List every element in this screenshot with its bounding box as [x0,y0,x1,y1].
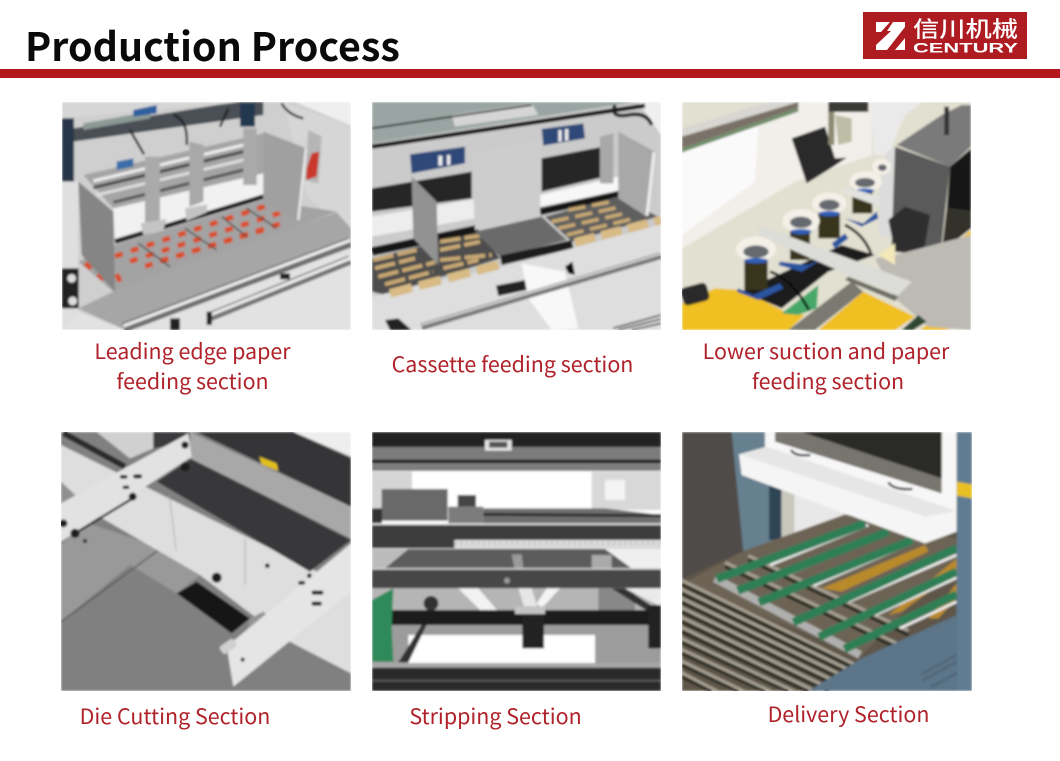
pull posts [141,103,257,235]
header rule [0,69,1060,78]
middle cross beam [372,569,661,588]
dark bracket [792,127,847,183]
tubes [770,225,872,310]
lower cross beam [372,610,661,625]
slot [177,582,250,633]
photo: cassette feeding section [372,102,661,330]
gold paper pieces [822,545,957,618]
logo: Century [863,12,1027,59]
green guard [372,588,393,662]
front body [372,224,661,330]
crossbar left [61,433,192,542]
icon: logo mark [876,22,905,50]
feed plates with orange suckers [78,200,337,292]
top beam [372,432,661,471]
photo: lower suction and paper feeding section [682,102,971,330]
caption: lower suction: feeding section [752,365,904,396]
title: Production Process [25,16,400,73]
right column [957,432,972,691]
white strips [770,525,957,628]
dark bed [157,458,351,572]
floor slab [61,522,200,622]
background machinery [372,472,412,508]
logo Chinese name: 信川机械 [913,12,1018,44]
back walls [682,432,743,579]
left feed plates [372,232,500,295]
red bracket [305,130,322,183]
front beam [78,212,351,328]
metal plate [875,235,971,330]
blue sensors [410,123,585,173]
left guide [78,182,115,292]
caption: cassette: Cassette feeding section [392,348,633,379]
bars [845,277,898,301]
center plate [472,141,541,230]
logo English name: CENTURY [913,40,1018,56]
handles [791,450,912,489]
photo: delivery section [682,432,972,691]
yellow frame [682,230,971,330]
clamp [522,607,544,648]
caption: lower suction [703,335,950,396]
bottom beam [372,663,661,691]
caption: delivery: Delivery Section [768,698,929,729]
crossbar right [227,543,351,687]
caption: die cutting: Die Cutting Section [80,700,270,731]
rollers [682,556,908,692]
right guide [263,132,307,222]
photo: leading edge paper feeding section [62,102,351,330]
rollers [390,220,661,293]
tray [739,447,957,543]
photo: stripping section [372,432,661,691]
metal head [888,105,971,258]
rod [682,102,798,152]
middle area [372,549,661,569]
suction cups [736,159,891,300]
right guide [618,132,655,217]
base cabinet [808,615,957,691]
left guide [412,177,438,265]
caption: lower suction: Lower suction and paper [703,335,949,366]
caption: leading edge [94,335,291,396]
caption: stripping: Stripping Section [409,700,582,731]
stripper box [382,489,448,521]
white window frame [765,432,957,512]
right feed plates [545,197,658,242]
photo: die cutting section [61,432,351,691]
upper cross beam [372,524,661,548]
rail [788,282,863,330]
caption: leading edge: Leading edge paper [94,335,291,366]
bolts and hardware [59,441,323,662]
warning label [259,457,278,471]
ruler [454,540,661,549]
suction table [475,217,567,257]
lower open area [372,625,661,664]
lower area [372,588,661,612]
rails [83,133,263,208]
caption: leading edge: feeding section [116,365,269,396]
dark chassis [742,245,875,308]
rods [123,240,350,328]
white machine side [61,445,351,673]
green belts [717,523,957,649]
